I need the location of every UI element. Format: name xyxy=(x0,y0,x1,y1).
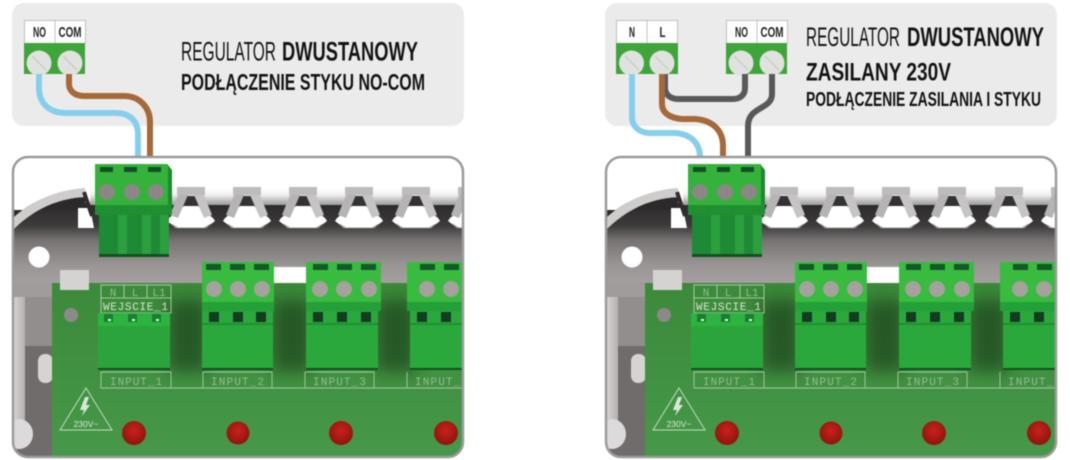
wire: brown xyxy=(69,74,150,165)
panel: right heading box xyxy=(605,3,1057,126)
panel: controller photo xyxy=(5,157,496,458)
circuit board xyxy=(52,283,472,458)
left diagram xyxy=(5,3,496,458)
terminal: input 2 xyxy=(202,262,274,370)
clips xyxy=(167,187,496,228)
input labels: INPUT_1 xyxy=(703,377,755,389)
label text: WEJSCIE_1 xyxy=(696,302,761,314)
panel outline xyxy=(606,157,1056,457)
panel: left heading box xyxy=(12,3,464,126)
terminal: input 4 xyxy=(407,262,467,370)
heading: zasilany 230V: ZASILANY 230V xyxy=(806,58,951,86)
input labels xyxy=(704,377,1054,386)
panel: controller photo xyxy=(598,157,1070,458)
terminal: input 3 xyxy=(899,262,974,370)
terminal block: NO COM: NO xyxy=(735,24,748,41)
icon: 230V warning: 230V~ xyxy=(74,419,98,429)
input labels xyxy=(110,377,460,386)
label text xyxy=(103,288,168,314)
heading: regulator dwustanowy: REGULATOR xyxy=(806,22,900,52)
labels: N L L1 xyxy=(101,285,171,313)
wire: brown xyxy=(662,74,723,165)
terminal block: NO COM: COM xyxy=(58,24,82,41)
wire: dark link xyxy=(665,74,745,99)
shadows xyxy=(761,300,1009,372)
terminal block: N L xyxy=(616,20,678,76)
terminal block: NO COM xyxy=(24,20,86,76)
terminal block: NO COM: COM xyxy=(760,24,784,41)
heading: regulator dwustanowy xyxy=(181,36,418,66)
label text: L xyxy=(725,288,731,300)
LEDs xyxy=(122,421,458,445)
terminal block: NO COM: NO xyxy=(33,24,46,41)
subheading: connection: PODŁĄCZENIE STYKU NO-COM xyxy=(181,69,425,95)
input labels: INPUT_4 xyxy=(1008,377,1061,389)
terminal block: N L: L xyxy=(660,24,666,41)
terminal: input 3 xyxy=(306,262,381,370)
plug connector xyxy=(688,164,765,257)
LEDs xyxy=(715,421,1051,445)
icon: 230V warning xyxy=(60,388,112,430)
terminal: input 2 xyxy=(795,262,867,370)
label text: WEJSCIE_1 xyxy=(103,302,168,314)
board hole xyxy=(64,308,78,322)
input labels: INPUT_2 xyxy=(211,377,264,389)
label text xyxy=(696,288,761,314)
label text: L xyxy=(132,288,138,300)
input label outlines xyxy=(694,372,1063,388)
terminal block: NO COM xyxy=(726,20,788,76)
mounting hole xyxy=(28,246,50,268)
icon: 230V warning xyxy=(653,388,705,430)
white gap xyxy=(274,267,306,283)
input labels: INPUT_3 xyxy=(313,377,366,389)
right diagram xyxy=(598,3,1070,458)
input label outlines xyxy=(101,372,470,388)
mounting tab xyxy=(60,270,89,290)
housing left wall xyxy=(606,290,646,456)
label text: L1 xyxy=(152,288,166,300)
label text: N xyxy=(110,288,116,300)
input labels: INPUT_1 xyxy=(110,377,162,389)
label text: N xyxy=(703,288,709,300)
label text: L1 xyxy=(745,288,759,300)
panel outline xyxy=(13,157,463,457)
wire: blue xyxy=(632,74,700,165)
input labels: INPUT_2 xyxy=(804,377,857,389)
heading: regulator dwustanowy: REGULATOR xyxy=(181,36,276,66)
mounting hole xyxy=(622,246,642,268)
plug connector xyxy=(95,164,172,257)
labels: N L L1 xyxy=(694,285,764,313)
wire: dark xyxy=(748,74,772,165)
terminal: input 1 xyxy=(691,313,763,370)
wire: blue xyxy=(39,74,138,165)
heading: regulator dwustanowy: DWUSTANOWY xyxy=(282,36,418,66)
housing left wall xyxy=(14,290,53,456)
clips xyxy=(760,187,1070,228)
circuit board xyxy=(645,283,1065,458)
white gap xyxy=(867,267,899,283)
heading: regulator dwustanowy xyxy=(806,22,1044,52)
board hole xyxy=(657,308,671,322)
terminal: input 1 xyxy=(98,313,170,370)
mounting tab xyxy=(653,270,682,290)
input labels: INPUT_4 xyxy=(415,377,468,389)
shadows xyxy=(168,300,416,372)
terminal block: N L: N xyxy=(629,24,635,41)
input labels: INPUT_3 xyxy=(906,377,959,389)
icon: 230V warning: 230V~ xyxy=(667,419,691,429)
terminal: input 4 xyxy=(1000,262,1060,370)
